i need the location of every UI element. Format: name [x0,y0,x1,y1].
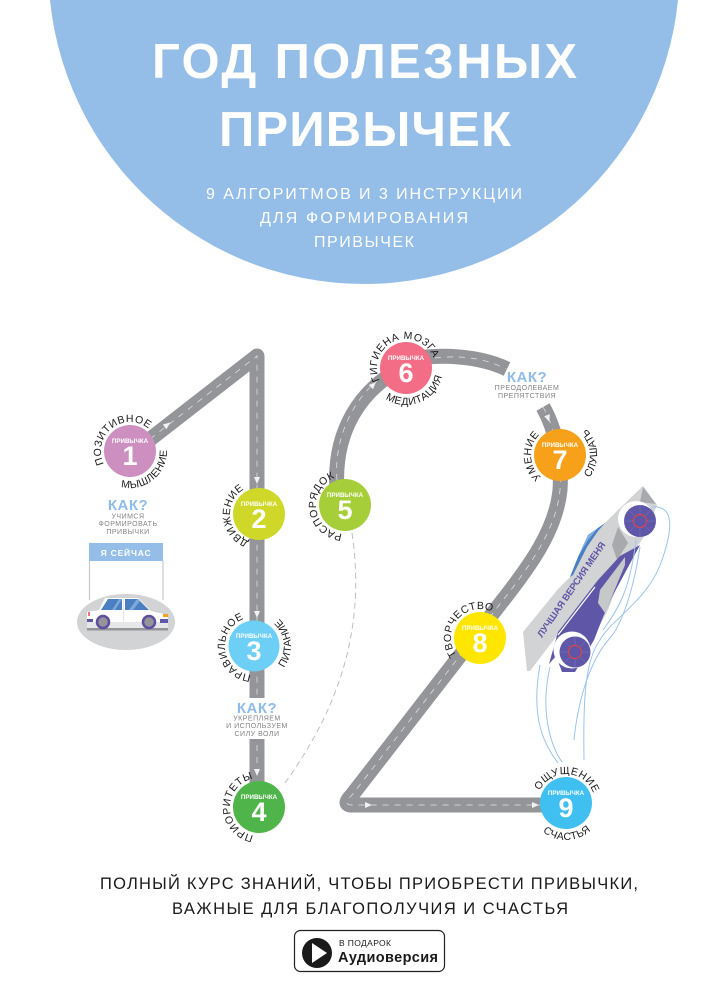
icon: play button [302,938,332,968]
how-to: forming habits: ПРИВЫЧКИ [106,529,150,536]
sign: current self with small car: Я СЕЙЧАС [101,547,151,558]
habit 9: 9 [558,793,574,823]
subtitle: ПРИВЫЧЕК [314,234,415,251]
sign: current self with small car [77,543,175,650]
subtitle: ДЛЯ ФОРМИРОВАНИЯ [260,210,468,227]
habit 7: УМЕНИЕ [524,430,541,482]
habit 6: ПРИВЫЧКА [388,355,425,362]
habit 2: ДВИЖЕНИЕ [222,484,250,547]
car wheels [554,501,656,668]
how-to: willpower [226,700,288,738]
subtitle [206,186,522,251]
habit 4: ПРИОРИТЕТЫ [222,772,253,842]
habit 5: ПРИВЫЧКА [327,492,364,499]
footer text: ПОЛНЫЙ КУРС ЗНАНИЙ, ЧТОБЫ ПРИОБРЕСТИ ПРИВЫЧКИ, [100,874,638,893]
label on car: ЛУЧШАЯ ВЕРСИЯ МЕНЯ [535,540,608,640]
habit 6: МЕДИТАЦИЯ [386,375,442,408]
speed trails [537,507,670,763]
habit 8: ТВОРЧЕСТВО [444,602,493,659]
how-to: forming habits: КАК? [108,497,148,514]
title: ГОД ПОЛЕЗНЫХ [152,35,577,89]
habit 9: СЧАСТЬЯ [544,825,590,840]
habit 5: РАСПОРЯДОК [308,472,342,541]
habit 9: ОЩУЩЕНИЕ [535,766,600,792]
habit 2: 2 [251,504,267,534]
habit 6: ГИГИЕНА МОЗГА [370,332,438,382]
audio badge: В ПОДАРОК [339,938,391,948]
icon: small car [87,598,168,630]
habit 2: ПРИВЫЧКА [241,501,278,508]
habit 3 [218,612,292,682]
car body [523,486,657,671]
how-to: willpower: СИЛУ ВОЛИ [234,731,280,738]
footer text [100,874,638,918]
habit 5: 5 [337,495,353,525]
how-to: obstacles: ПРЕОДОЛЕВАЕМ [495,385,559,392]
habit 3: ПРАВИЛЬНОЕ [218,612,250,682]
habit 6 [370,332,442,408]
dashed link from habit 4 to habit 5 [285,533,356,783]
header panel [48,0,680,284]
habit 1 [94,414,168,488]
habit 2 [222,484,285,547]
road: number two [337,356,566,808]
title [152,35,577,157]
habit 1: ПРИВЫЧКА [112,438,149,445]
habit 4 [222,772,285,842]
how-to: forming habits: ФОРМИРОВАТЬ [98,521,158,528]
habit 3: 3 [246,636,262,666]
subtitle: 9 АЛГОРИТМОВ И 3 ИНСТРУКЦИИ [206,186,522,203]
how-to: willpower: И ИСПОЛЬЗУЕМ [226,723,288,730]
how-to: forming habits [98,497,158,536]
habit 9: ПРИВЫЧКА [548,790,585,797]
habit 3: ПИТАНИЕ [274,619,292,668]
habit 1: 1 [122,441,138,471]
habit 4: ПРИВЫЧКА [241,794,278,801]
habit 7: 7 [552,445,568,475]
illustration: best version race car [523,486,670,763]
habit 7: ПРИВЫЧКА [542,442,579,449]
habit 5 [308,472,371,541]
habit 6: 6 [398,358,414,388]
habit 3: ПРИВЫЧКА [236,633,273,640]
how-to: obstacles: КАК? [507,369,547,386]
how-to: willpower: КАК? [237,700,277,717]
habit 7 [524,429,598,482]
audio badge [294,930,444,972]
habit 1: ПОЗИТИВНОЕ [94,414,152,466]
road: number one [140,356,260,800]
habit 1: МЫШЛЕНИЕ [122,450,168,488]
habit 4: 4 [251,797,267,827]
audio badge: Аудиоверсия [338,950,438,966]
how-to: willpower: УКРЕПЛЯЕМ [233,716,281,722]
how-to: obstacles: ПРЕПЯТСТВИЯ [498,393,556,400]
habit 8: 8 [472,628,488,658]
habit 9 [535,766,600,840]
habit 8: ПРИВЫЧКА [462,625,499,632]
footer text: ВАЖНЫЕ ДЛЯ БЛАГОПОЛУЧИЯ И СЧАСТЬЯ [172,900,568,918]
habit 7: СЛУШАТЬ [584,430,598,476]
title: ПРИВЫЧЕК [219,103,511,157]
how-to: obstacles [495,369,559,400]
how-to: forming habits: УЧИМСЯ [111,514,145,520]
